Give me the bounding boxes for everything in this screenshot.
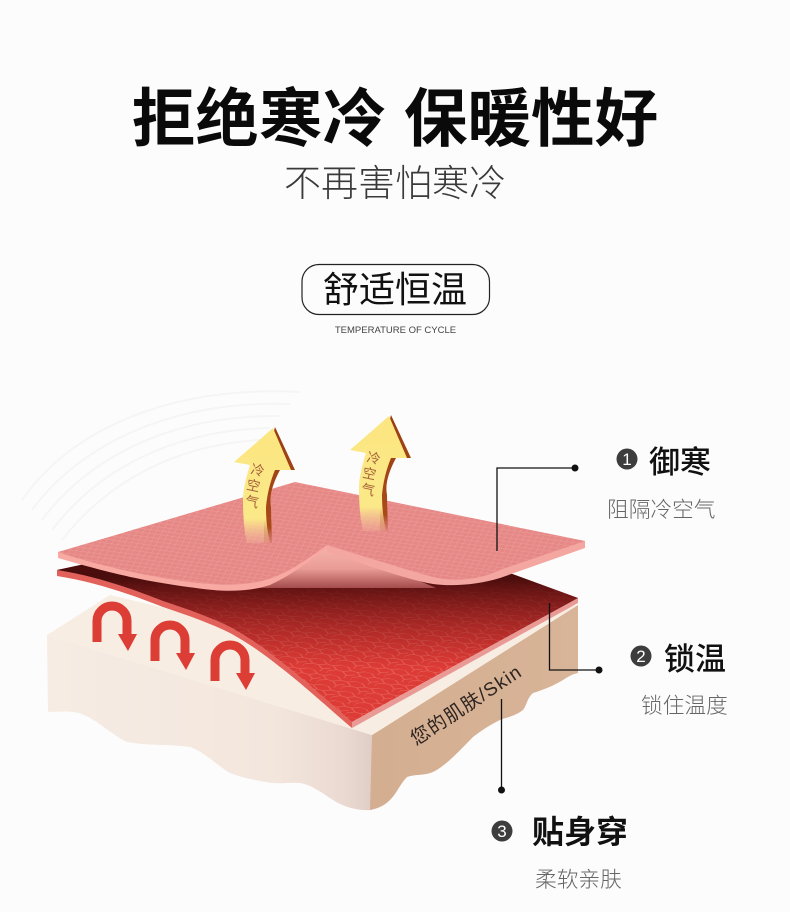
label 1 description: 阻隔冷空气 <box>607 497 715 522</box>
badge: 舒适恒温 <box>302 264 490 314</box>
top pink layer <box>58 482 585 591</box>
label 2: 锁温: 2 <box>636 647 646 666</box>
top layer right thickness <box>327 541 585 585</box>
cold air arrow 1 <box>234 427 295 543</box>
skin block <box>47 595 578 810</box>
leader line 3 <box>498 699 505 794</box>
red layer shadow <box>57 550 578 722</box>
label 2 description: 锁住温度 <box>641 693 728 718</box>
badge caption: TEMPERATURE OF CYCLE <box>335 325 456 336</box>
label 1: 御寒: 1 <box>622 450 632 469</box>
cold air arrow 2 <box>350 415 411 531</box>
label 1: 御寒 <box>616 445 711 480</box>
arrow text: 空 <box>361 465 378 483</box>
heat arrows <box>97 606 255 690</box>
skin right face <box>370 605 578 810</box>
label 2: 锁温: 锁温 <box>664 642 726 677</box>
red layer surface <box>57 550 578 722</box>
arrow text: 气 <box>360 481 376 499</box>
arrow text: 冷 <box>365 450 382 467</box>
background ripple arcs <box>22 391 300 540</box>
skin label: 您的肌肤/Skin <box>407 661 526 750</box>
heat arrow 3 <box>215 645 255 690</box>
red warming layer <box>57 550 578 728</box>
label 3 description: 柔软亲肤 <box>535 867 622 892</box>
heat arrow 1 <box>97 606 137 651</box>
skin left face <box>47 635 372 810</box>
label 3: 贴身穿: 贴身穿 <box>532 814 628 850</box>
red layer edge <box>57 570 352 728</box>
label 2: 锁温 <box>630 642 726 677</box>
leader line 2 <box>550 603 602 674</box>
top layer left thickness <box>58 544 327 591</box>
red layer pink edge <box>352 598 578 728</box>
badge: 舒适恒温: 舒适恒温 <box>323 269 467 310</box>
leader line 1 <box>497 464 578 551</box>
title: 拒绝寒冷 保暖性好 <box>132 84 658 155</box>
layered fabric illustration <box>47 415 585 810</box>
skin top face <box>47 595 578 735</box>
arrow text: 空 <box>245 477 262 495</box>
curled underside <box>240 545 436 588</box>
label 3: 贴身穿: 3 <box>497 822 507 841</box>
arrow text: 气 <box>244 493 260 511</box>
top layer surface <box>58 482 585 585</box>
subtitle: 不再害怕寒冷 <box>284 163 506 204</box>
label 1: 御寒: 御寒 <box>649 445 711 480</box>
heat arrow 2 <box>155 625 195 670</box>
arrow text: 冷 <box>249 462 266 479</box>
